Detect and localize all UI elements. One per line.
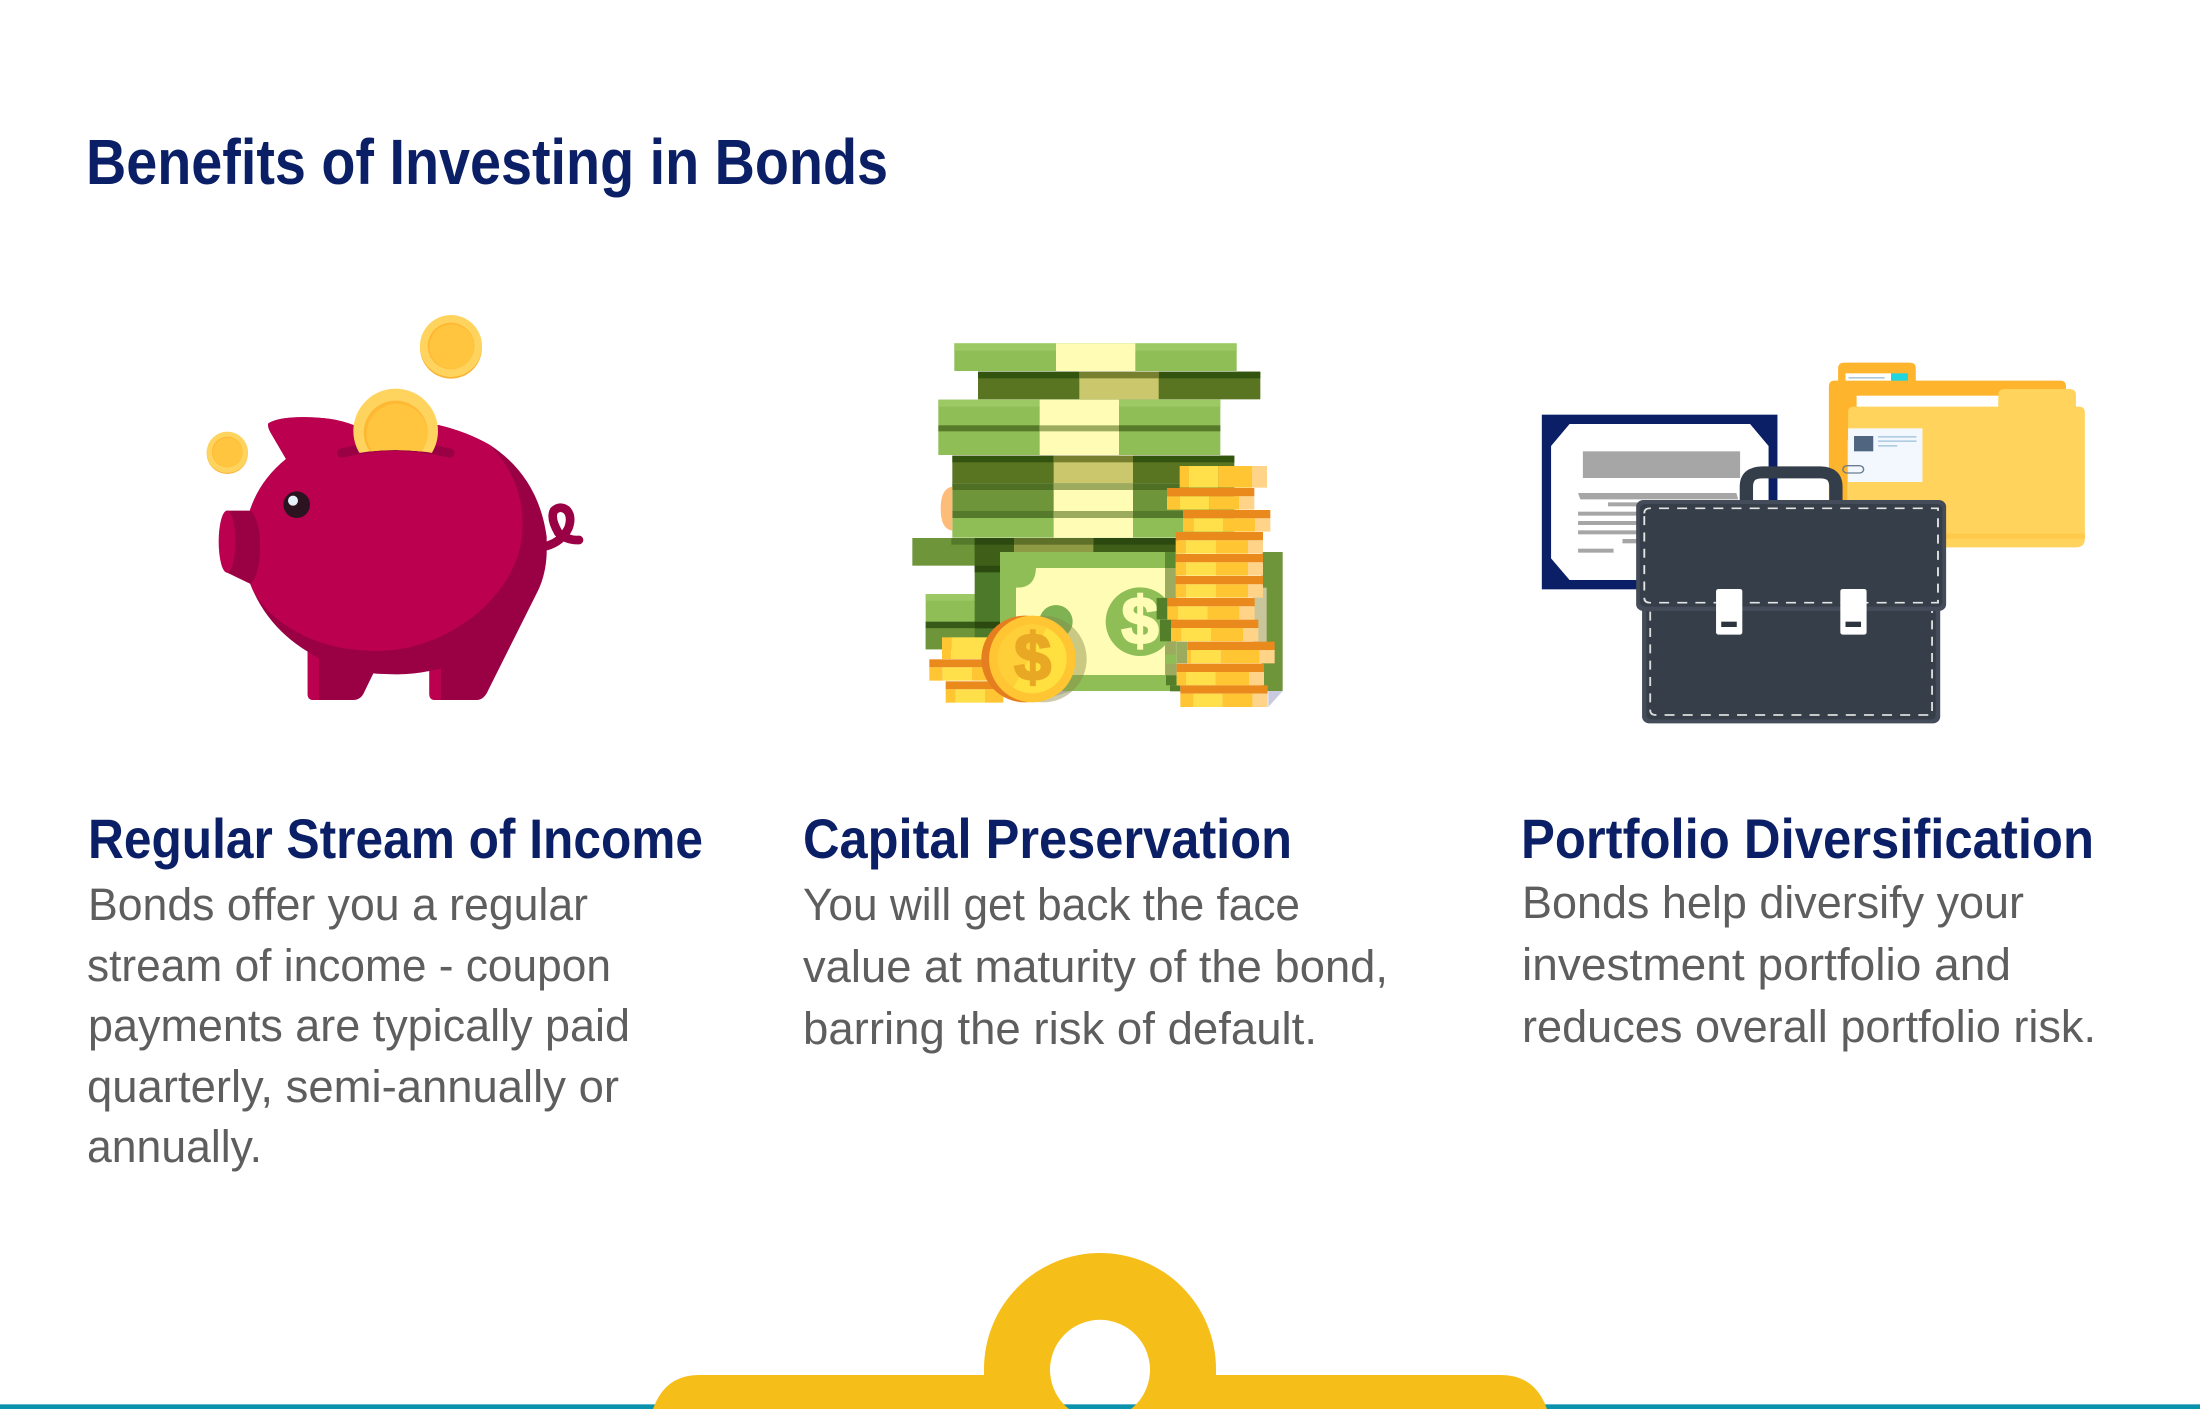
body text: investment portfolio and <box>1522 939 2011 990</box>
body text: value at maturity of the bond, <box>803 941 1388 992</box>
body text: You will get back the face <box>803 879 1300 930</box>
column: regular stream of income <box>87 807 703 1172</box>
footer yellow connector shape <box>653 1253 1547 1409</box>
heading: Capital Preservation <box>803 807 1292 870</box>
right coin stack <box>1167 466 1275 707</box>
title: Benefits of Investing in Bonds <box>86 126 888 198</box>
second bill bundle <box>978 372 1260 399</box>
heading: Portfolio Diversification <box>1521 807 2094 870</box>
body text: stream of income - coupon <box>87 940 611 991</box>
body text: Bonds help diversify your <box>1522 877 2024 928</box>
pig tail <box>547 508 579 546</box>
top bill bundle <box>954 343 1237 371</box>
icon: stacks of money and coins <box>912 343 1283 707</box>
pig front legs highlight <box>308 652 441 700</box>
footer teal line <box>0 1404 2200 1409</box>
pig body shadow <box>250 417 547 700</box>
dollar sign on coin: $ <box>1014 621 1051 695</box>
icon: piggy bank with coins <box>207 315 579 700</box>
yellow file folder <box>1829 363 2085 547</box>
briefcase left clasp <box>1716 589 1742 635</box>
fourth bill bundle <box>952 456 1234 483</box>
fifth bill bundle <box>952 483 1234 538</box>
lower left bill bundles <box>912 538 1178 653</box>
body text <box>87 879 630 1172</box>
bond certificate <box>1542 415 1777 589</box>
large banknote <box>1000 552 1283 707</box>
pig eye <box>283 491 310 518</box>
body text: Bonds offer you a regular <box>88 879 588 930</box>
icon: coin entering slot <box>353 388 438 453</box>
column: capital preservation <box>803 807 1388 1054</box>
pig snout <box>219 511 260 584</box>
heading: Regular Stream of Income <box>88 807 703 870</box>
column: portfolio diversification <box>1521 807 2096 1052</box>
dollar sign on note: $ <box>1121 584 1159 658</box>
icon: certificate, folder and briefcase <box>1542 363 2085 723</box>
body text: payments are typically paid <box>88 1000 630 1051</box>
third bill bundle <box>938 400 1220 455</box>
peach bill edge <box>941 487 952 531</box>
briefcase right clasp <box>1840 589 1867 635</box>
body text: reduces overall portfolio risk. <box>1522 1001 2096 1052</box>
left coin stack <box>929 637 1006 703</box>
briefcase <box>1636 472 1946 723</box>
body text <box>1522 877 2096 1052</box>
body text <box>803 879 1388 1054</box>
pig coin slot <box>342 446 450 453</box>
body text: quarterly, semi-annually or <box>87 1061 619 1112</box>
pig body <box>250 417 523 651</box>
icon: falling coin top <box>420 315 482 379</box>
body text: barring the risk of default. <box>803 1003 1317 1054</box>
large dollar coin <box>981 616 1087 702</box>
icon: falling coin left <box>207 432 248 474</box>
body text: annually. <box>87 1121 262 1172</box>
